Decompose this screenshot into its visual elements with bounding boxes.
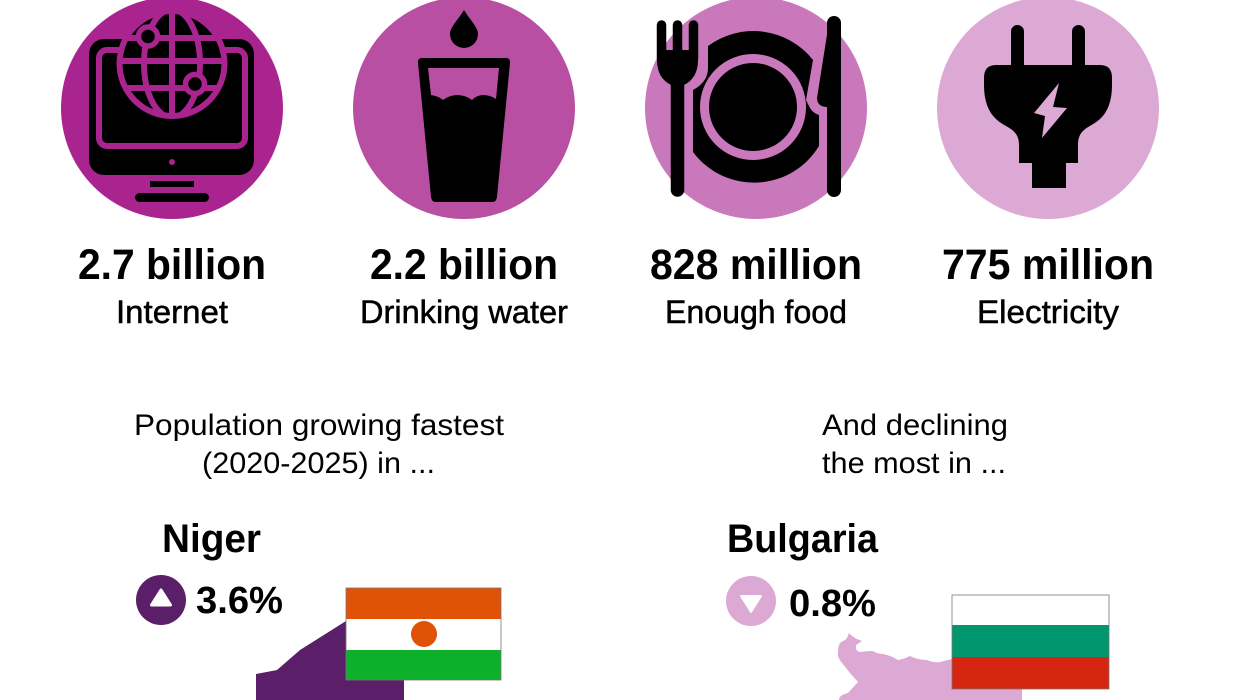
icon: computer with globe — [61, 0, 283, 219]
flag: Niger — [346, 588, 501, 680]
panel: drinking water — [353, 0, 575, 330]
decline value: 0.8%: 0.8% — [789, 583, 876, 625]
heading: population growing fastest — [134, 409, 505, 480]
heading: declining the most: And declining — [822, 409, 1008, 442]
panel: electricity — [937, 0, 1159, 330]
label: Electricity: Electricity — [977, 294, 1119, 330]
heading: declining the most: the most in ... — [822, 447, 1006, 480]
figure: 775 million: 775 million — [942, 241, 1154, 289]
label: Enough food: Enough food — [665, 294, 847, 330]
figure: 828 million: 828 million — [650, 241, 862, 289]
label: Drinking water: Drinking water — [360, 294, 568, 330]
icon: glass of water — [353, 0, 575, 219]
map: Bulgaria — [838, 633, 1022, 700]
heading: declining the most — [822, 409, 1008, 480]
country name: Bulgaria: Bulgaria — [727, 517, 879, 561]
panel: Niger — [136, 517, 501, 700]
label: Internet: Internet — [116, 294, 228, 330]
figure: 2.7 billion: 2.7 billion — [78, 241, 266, 289]
panel: internet — [61, 0, 283, 330]
panel: Bulgaria — [726, 517, 1109, 700]
map: Niger — [256, 621, 404, 700]
icon: electric plug — [937, 0, 1159, 219]
figure: 2.2 billion: 2.2 billion — [370, 241, 558, 289]
country name: Niger: Niger — [162, 517, 261, 561]
heading: population growing fastest: Population growing fastest — [134, 409, 505, 442]
heading: population growing fastest: (2020-2025) in ... — [202, 447, 435, 480]
icon: down arrow badge — [726, 576, 776, 626]
icon: plate with fork and knife — [645, 0, 867, 219]
growth value: 3.6%: 3.6% — [196, 580, 283, 622]
icon: up arrow badge — [136, 575, 186, 625]
flag: Bulgaria — [952, 595, 1109, 689]
panel: enough food — [645, 0, 867, 330]
